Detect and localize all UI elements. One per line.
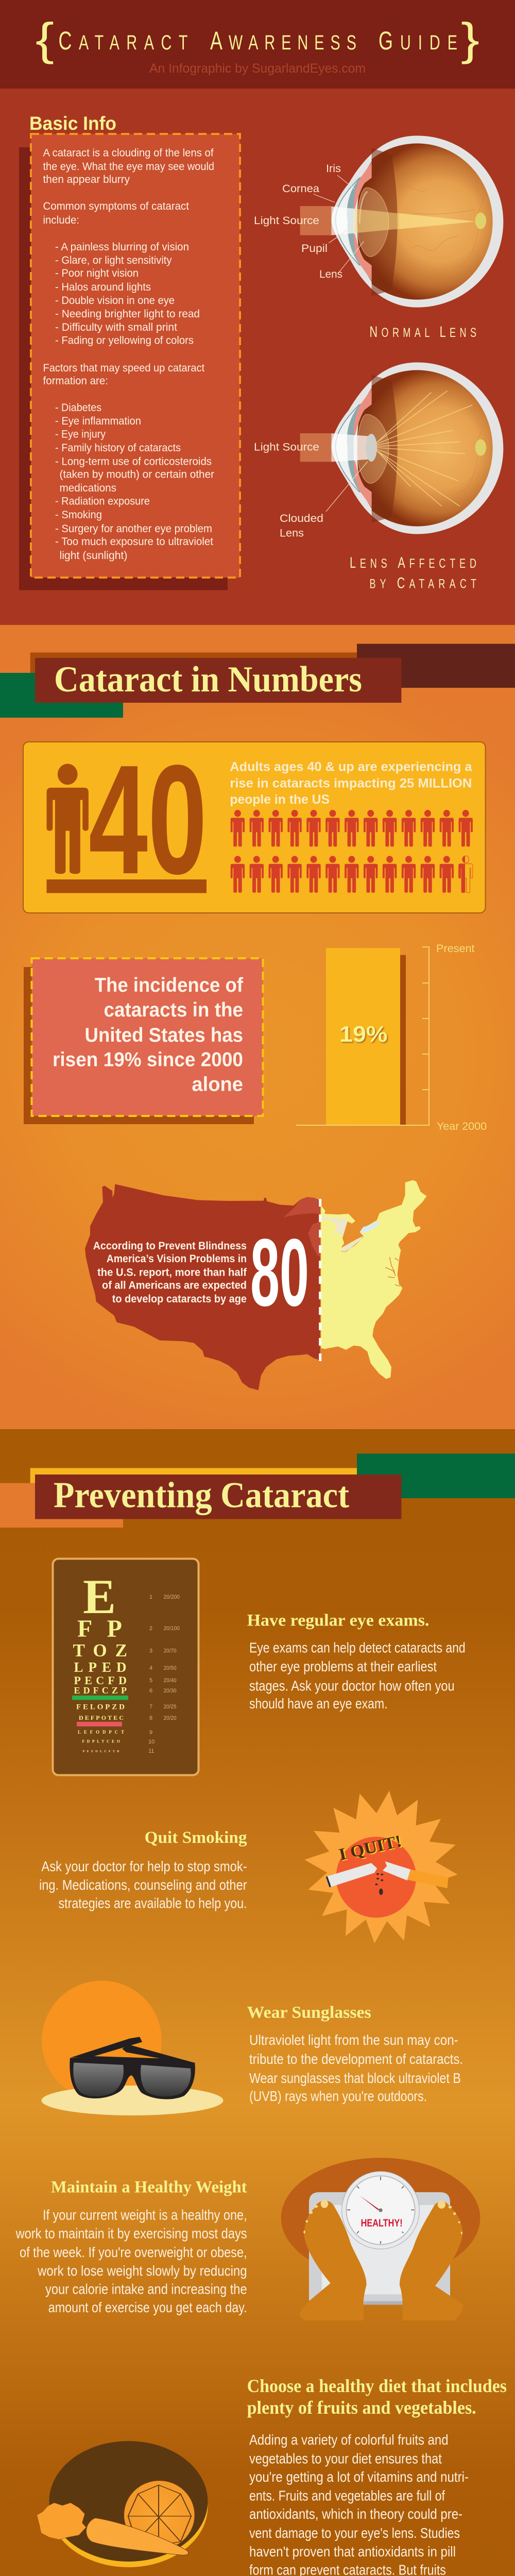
labels: normal eye: Iris xyxy=(326,163,341,175)
icon: eye chart: PEZOLCFTD xyxy=(83,1750,119,1753)
body text: - Smoking xyxy=(55,509,102,521)
callout: 19 percent rise: United States has xyxy=(84,1024,243,1046)
body text: - Poor night vision xyxy=(55,267,139,279)
divider xyxy=(319,1199,321,1362)
labels: cataract eye: Lens xyxy=(280,528,304,539)
big number 40: 40 xyxy=(89,733,207,906)
tip: wear sunglasses: tribute to the development of cataracts. xyxy=(249,2051,463,2067)
tip: healthy weight: amount of exercise you get each day. xyxy=(48,2299,247,2315)
body text: - Long-term use of corticosteroids xyxy=(55,455,212,468)
tip: wear sunglasses: Wear Sunglasses xyxy=(247,2003,371,2022)
body text: - Glare, or light sensitivity xyxy=(55,254,172,266)
caption: lens affected by cataract: BY C ATARACT xyxy=(369,574,476,591)
tip: quit smoking: ing. Medications, counseling and other xyxy=(39,1877,247,1893)
icon: fruit and vegetables xyxy=(37,2441,208,2567)
tip: healthy diet: antioxidants, which in theory could pre- xyxy=(249,2506,462,2522)
icon: eye chart xyxy=(53,1559,199,1775)
right foot xyxy=(400,2200,463,2320)
statement text: people in the US xyxy=(230,792,330,807)
tip: healthy diet: you're getting a lot of vitamins and nutri- xyxy=(249,2469,469,2485)
map text: the U.S. report, more than half xyxy=(97,1267,247,1279)
icon: i quit starburst: I QUIT! xyxy=(337,1832,404,1865)
icon: eye chart: 2 xyxy=(149,1625,152,1632)
icon: eye chart: 20/30 xyxy=(164,1688,177,1694)
body text: A cataract is a clouding of the lens of xyxy=(43,147,214,159)
title: C ATARACT xyxy=(58,27,187,55)
icon: bathroom scale with feet xyxy=(281,2158,480,2320)
tip: healthy diet: plenty of fruits and vegetables. xyxy=(247,2397,476,2418)
tip: wear sunglasses: Ultraviolet light from the sun may con- xyxy=(249,2032,458,2048)
header banner xyxy=(0,0,515,89)
labels: normal eye: Lens xyxy=(319,268,342,280)
icon: eye chart: EDFCZP xyxy=(74,1685,127,1696)
icon: large person xyxy=(46,764,89,874)
icon: eye chart: 20/50 xyxy=(164,1665,177,1671)
icon: eye chart: 20/200 xyxy=(164,1594,180,1600)
icon row: people pictogram xyxy=(231,810,473,893)
icon: eye chart: LEFODPCT xyxy=(78,1730,124,1735)
body text: (taken by mouth) or certain other xyxy=(60,468,214,481)
icon: eye chart: 11 xyxy=(148,1748,154,1754)
body text: - Too much exposure to ultraviolet xyxy=(55,535,213,548)
icon: eye chart: 6 xyxy=(149,1688,152,1694)
tip: healthy weight: Maintain a Healthy Weight xyxy=(51,2178,247,2196)
title: { xyxy=(36,13,54,64)
title: A WARENESS xyxy=(210,27,356,55)
icon: eye chart: 7 xyxy=(149,1704,152,1710)
labels: normal eye xyxy=(254,163,342,280)
underline bar xyxy=(46,879,207,893)
caption: lens affected by cataract xyxy=(350,553,476,591)
map text: America’s Vision Problems in xyxy=(107,1253,247,1265)
tip: regular eye exams: should have an eye exam. xyxy=(249,1696,387,1711)
icon: eye chart: TOZ xyxy=(73,1640,127,1660)
panel: preventing cataract section xyxy=(0,1429,515,2576)
tip: healthy diet: Adding a variety of colorful fruits and xyxy=(249,2432,448,2448)
heading: basic info: Basic Info xyxy=(29,113,116,134)
body text: medications xyxy=(60,482,116,494)
body text: - Difficulty with small print xyxy=(55,321,177,333)
icon: eye chart: PECFD xyxy=(74,1674,127,1687)
body text: the eye. What the eye may see would xyxy=(43,160,214,173)
icon: eye chart: FP xyxy=(77,1615,122,1642)
body text: - Family history of cataracts xyxy=(55,442,181,454)
labels: normal eye: Pupil xyxy=(301,243,328,255)
labels: cataract eye xyxy=(254,442,323,539)
tip: healthy weight: of the week. If you're overweight or obese, xyxy=(20,2244,247,2260)
statement text: rise in cataracts impacting 25 MILLION xyxy=(230,776,472,791)
tip: wear sunglasses xyxy=(247,2003,463,2104)
map text: According to Prevent Blindness xyxy=(93,1240,247,1252)
tip: healthy diet: vegetables to your diet ensures that xyxy=(249,2451,442,2467)
icon: bathroom scale with feet: HEALTHY! xyxy=(361,2218,403,2229)
tip: healthy weight: your calorie intake and increasing the xyxy=(45,2281,247,2297)
icon: eye chart: 20/100 xyxy=(164,1625,180,1632)
body text: Factors that may speed up cataract xyxy=(43,362,204,374)
tip: healthy weight: If your current weight is a healthy one, xyxy=(43,2207,247,2223)
map: eastern half xyxy=(321,1180,426,1379)
panel: cataract in numbers section xyxy=(0,625,515,1429)
body text: - Needing brighter light to read xyxy=(55,308,200,320)
body text xyxy=(43,147,214,562)
panel: adults 40 and up xyxy=(23,733,486,913)
labels: cataract eye: Light Source xyxy=(254,442,319,453)
body text: then appear blurry xyxy=(43,173,130,185)
callout: 19 percent rise: The incidence of xyxy=(95,974,244,996)
labels: normal eye: Light Source xyxy=(254,215,319,227)
tip: regular eye exams: Eye exams can help detect cataracts and xyxy=(249,1640,466,1656)
subtitle: An Infographic by SugarlandEyes.com xyxy=(149,61,366,76)
icon: eye chart: 20/40 xyxy=(164,1677,177,1684)
labels: normal eye: Cornea xyxy=(282,183,319,195)
icon: eye chart: 3 xyxy=(149,1648,152,1654)
callout: 19 percent rise: cataracts in the xyxy=(104,999,243,1021)
tip: healthy diet: haven't proven that antioxidants in pill xyxy=(249,2544,456,2560)
bar chart: rise since 2000: Year 2000 xyxy=(437,1121,487,1132)
body text: - Eye inflammation xyxy=(55,415,141,427)
icon: eye chart: 5 xyxy=(149,1677,152,1684)
icon: sunglasses and sun xyxy=(41,1980,224,2115)
caption: lens affected by cataract: L ENS A FFECTED xyxy=(350,553,476,571)
orange slice xyxy=(124,2481,195,2550)
map text: of all Americans are expected xyxy=(102,1280,247,1292)
body text: - Halos around lights xyxy=(55,281,151,293)
diagram: eye with cataract xyxy=(300,362,503,534)
body text: - Double vision in one eye xyxy=(55,294,175,307)
labels: cataract eye: Clouded xyxy=(280,513,323,524)
icon: eye chart: FDPLTCEO xyxy=(82,1739,120,1744)
left foot xyxy=(300,2200,367,2320)
tip: quit smoking: Ask your doctor for help to stop smok- xyxy=(41,1858,247,1874)
map: western half xyxy=(85,1184,320,1390)
body text: Common symptoms of cataract xyxy=(43,200,189,212)
body text: include: xyxy=(43,214,79,226)
tip: healthy weight: work to maintain it by exercising most days xyxy=(15,2226,247,2242)
tip: regular eye exams xyxy=(247,1612,466,1711)
pointer: clouded lens xyxy=(326,462,368,512)
icon: eye chart: E xyxy=(83,1569,116,1624)
body text: light (sunlight) xyxy=(60,549,128,562)
tip: healthy diet: ents. Fruits and vegetables are full of xyxy=(249,2488,445,2504)
bar chart: rise since 2000: Present xyxy=(436,943,475,955)
statement text: Adults ages 40 & up are experiencing a xyxy=(230,759,472,774)
body text: - Eye injury xyxy=(55,428,106,440)
heading: preventing cataract: Preventing Cataract xyxy=(54,1476,349,1516)
text box: basic info xyxy=(19,134,240,590)
tip: healthy weight xyxy=(15,2178,247,2315)
caption: normal lens: N ORMAL L ENS xyxy=(369,323,476,341)
tip: healthy diet: vent damage to your eye's lens. Studies xyxy=(249,2525,460,2541)
icon: eye chart: 20/20 xyxy=(164,1715,177,1721)
title: } xyxy=(461,13,479,64)
icon: i quit starburst xyxy=(304,1791,457,1943)
map text: to develop cataracts by age xyxy=(112,1293,247,1305)
icon: eye chart: 1 xyxy=(149,1594,152,1600)
body text: - Fading or yellowing of colors xyxy=(55,334,194,346)
tip: wear sunglasses: (UVB) rays when you're outdoors. xyxy=(249,2088,427,2104)
body text: formation are: xyxy=(43,375,108,387)
heading: preventing cataract xyxy=(0,1453,515,1528)
icon: eye chart: 10 xyxy=(148,1739,154,1745)
callout: 19 percent rise: risen 19% since 2000 xyxy=(53,1049,243,1071)
icon: eye chart: 8 xyxy=(149,1715,152,1721)
light rays scattered by clouded lens xyxy=(376,391,472,506)
callout: 19 percent rise xyxy=(24,958,263,1124)
bar chart: rise since 2000: 19% xyxy=(339,1022,387,1047)
icon: eye chart: FELOPZD xyxy=(76,1703,125,1711)
icon: eye chart: LPED xyxy=(74,1659,127,1675)
body text: - Radiation exposure xyxy=(55,495,150,507)
body text: - Surgery for another eye problem xyxy=(55,522,212,535)
tip: healthy weight: work to lose weight slowly by reducing xyxy=(37,2263,247,2279)
panel: basic info section xyxy=(0,89,515,625)
carrot xyxy=(37,2503,188,2555)
tip: quit smoking: strategies are available to help you. xyxy=(59,1895,247,1911)
title: G UIDE xyxy=(379,27,457,55)
tip: regular eye exams: Have regular eye exams. xyxy=(247,1612,430,1630)
bar chart: rise since 2000 xyxy=(296,943,487,1132)
big number 80: 80 xyxy=(250,1219,309,1326)
tip: healthy diet xyxy=(247,2376,507,2576)
body text: - A painless blurring of vision xyxy=(55,241,189,253)
icon: eye chart: DEFPOTEC xyxy=(79,1714,124,1721)
heading: cataract in numbers xyxy=(0,644,515,718)
map: united states split xyxy=(85,1180,426,1390)
icon: eye chart: 4 xyxy=(149,1665,152,1671)
tip: quit smoking xyxy=(39,1828,247,1911)
icon: eye chart: 9 xyxy=(149,1730,152,1736)
icon: eye chart: 20/25 xyxy=(164,1704,177,1710)
title xyxy=(36,13,479,64)
body text: - Diabetes xyxy=(55,401,101,414)
tip: regular eye exams: stages. Ask your doctor how often you xyxy=(249,1678,455,1694)
tip: wear sunglasses: Wear sunglasses that block ultraviolet B xyxy=(249,2070,461,2086)
callout: 19 percent rise: alone xyxy=(192,1073,243,1095)
map text xyxy=(93,1240,247,1305)
diagram: normal eye xyxy=(300,135,503,308)
icon: eye chart: 20/70 xyxy=(164,1648,177,1654)
heading: cataract in numbers: Cataract in Numbers xyxy=(54,659,362,700)
tip: healthy diet: Choose a healthy diet that includes xyxy=(247,2376,507,2396)
tip: quit smoking: Quit Smoking xyxy=(145,1828,247,1847)
tip: regular eye exams: other eye problems at their earliest xyxy=(249,1658,437,1674)
statement text xyxy=(230,759,472,807)
